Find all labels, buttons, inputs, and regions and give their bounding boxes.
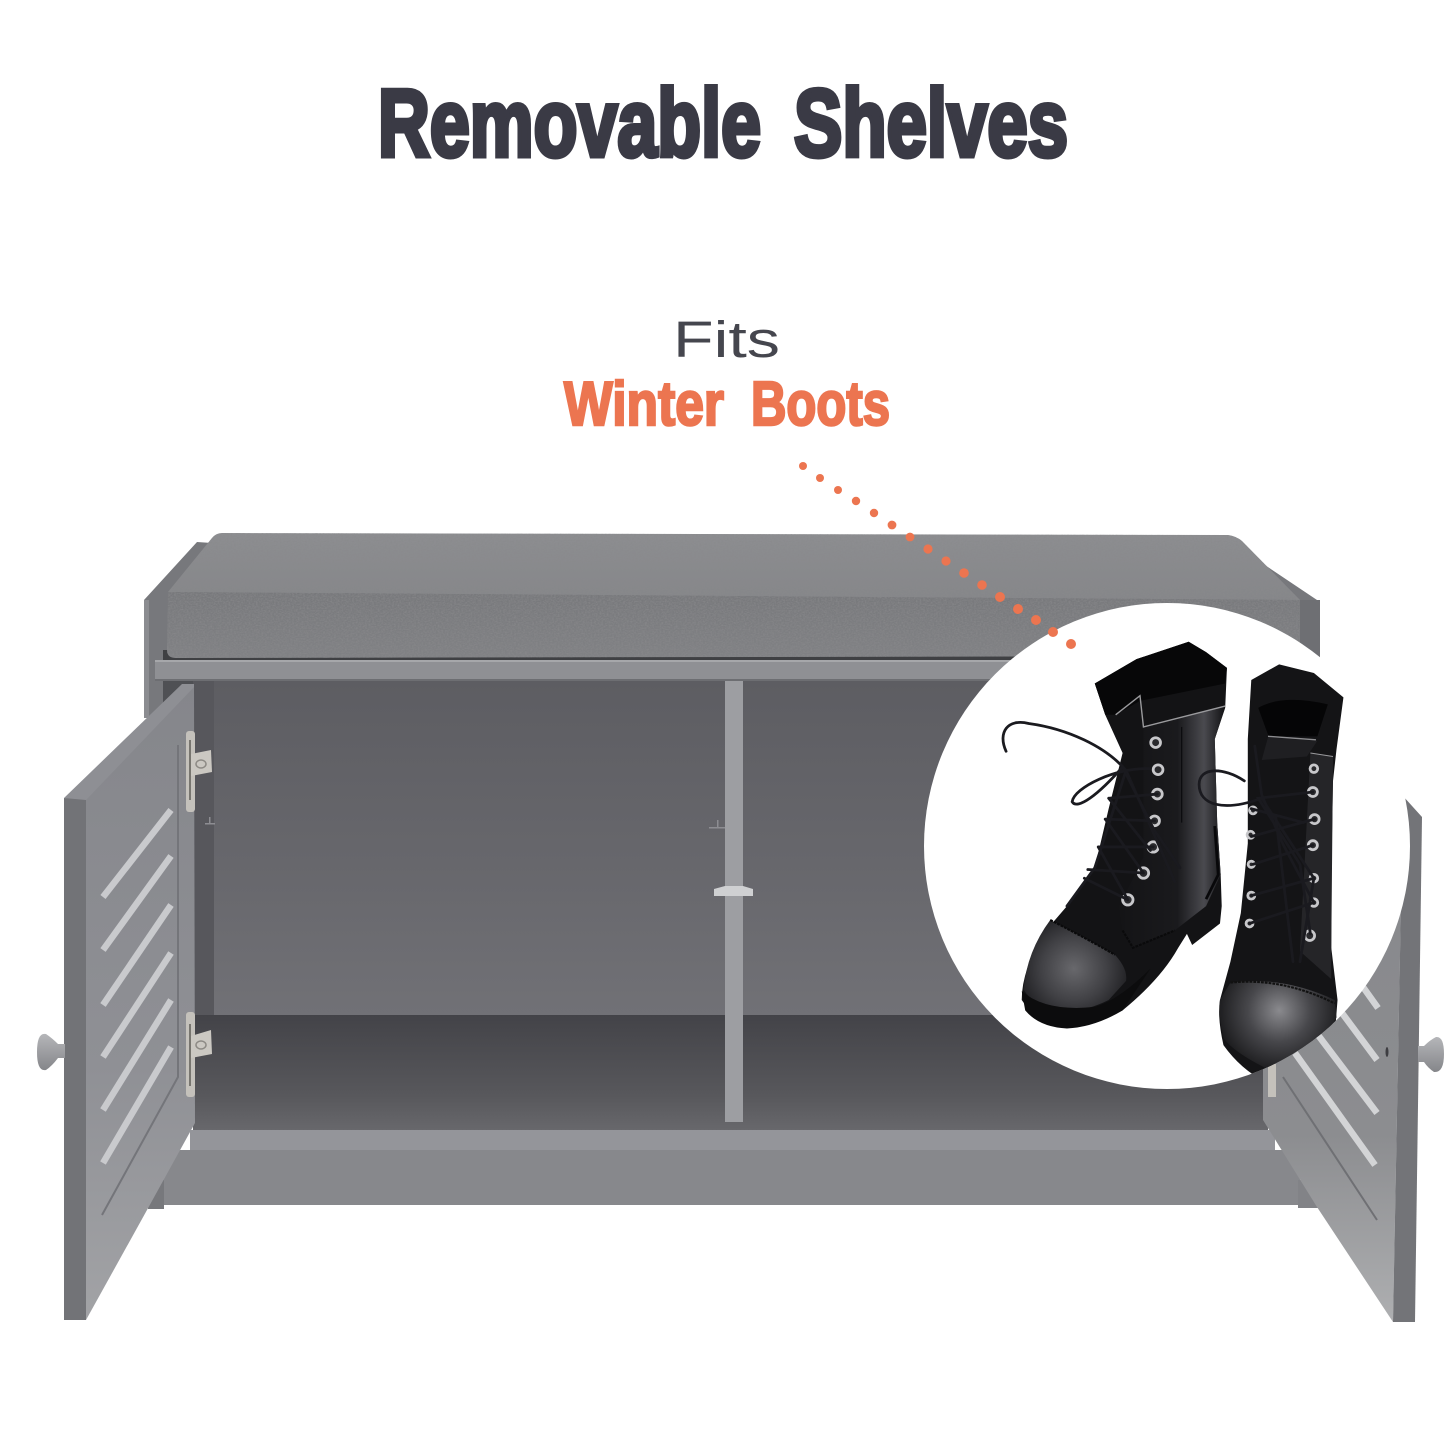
right door knob [1418, 1037, 1444, 1072]
left door knob [37, 1034, 65, 1070]
left door louvre slats [103, 810, 171, 1163]
right door recessed panel [1283, 1077, 1377, 1220]
right door outer edge [1393, 796, 1422, 1322]
left door recessed panel [102, 745, 178, 1215]
hinge: bottom left [186, 1012, 212, 1097]
left door [37, 684, 195, 1320]
title: Shelves [794, 70, 1068, 177]
dotted leader line [799, 462, 1076, 649]
left door outer edge [64, 798, 86, 1320]
title: Removable [378, 70, 761, 177]
interior back wall: right compartment [742, 681, 1282, 1016]
icon: boot eyelets [1123, 738, 1319, 940]
left door inner face [86, 687, 195, 1320]
icon: boot laces [1003, 722, 1315, 962]
callout: winter boots photo [1003, 642, 1343, 1082]
subheading: Winter Boots: Winter [564, 370, 724, 439]
icon: left boot [1022, 642, 1227, 1028]
top shelf rail [155, 660, 1305, 681]
compartment floor [193, 1015, 1268, 1131]
boots callout circle [924, 603, 1410, 1089]
subheading: Winter Boots [564, 370, 890, 439]
centre divider [205, 681, 753, 1122]
icon: right boot [1219, 664, 1343, 1082]
bench illustration [37, 530, 1444, 1322]
hinge: top left [186, 731, 212, 812]
bench frame: back top and side panels [144, 542, 1320, 721]
seat cushion [160, 530, 1310, 660]
right door louvre slats [1295, 987, 1378, 1165]
right door [1263, 700, 1444, 1322]
subheading: Winter Boots: Boots [751, 370, 890, 439]
left door top edge [64, 684, 194, 802]
bottom front rail [190, 1130, 1275, 1150]
interior back wall: left compartment [213, 681, 726, 1016]
hinge: bottom right [1268, 1064, 1276, 1097]
subheading: Fits: Fits [673, 311, 780, 368]
right door inner face [1263, 700, 1403, 1322]
interior left side wall [193, 681, 214, 1016]
base kick plate [148, 1150, 1318, 1209]
